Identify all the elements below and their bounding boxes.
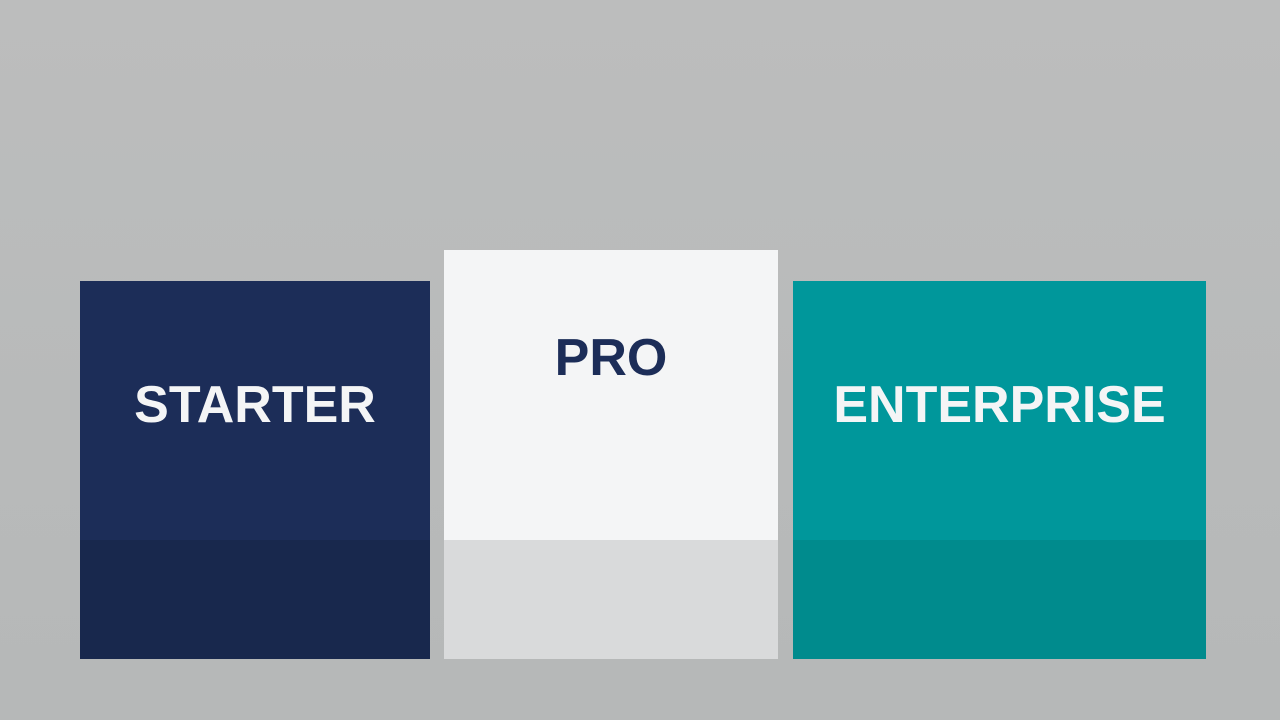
panel: starter (80, 281, 430, 659)
panel: pro (444, 250, 778, 659)
panel: enterprise (793, 281, 1206, 659)
heading: enterprise: ENTERPRISE (833, 376, 1166, 434)
heading: starter: STARTER (134, 376, 376, 434)
heading: pro: PRO (555, 329, 667, 387)
